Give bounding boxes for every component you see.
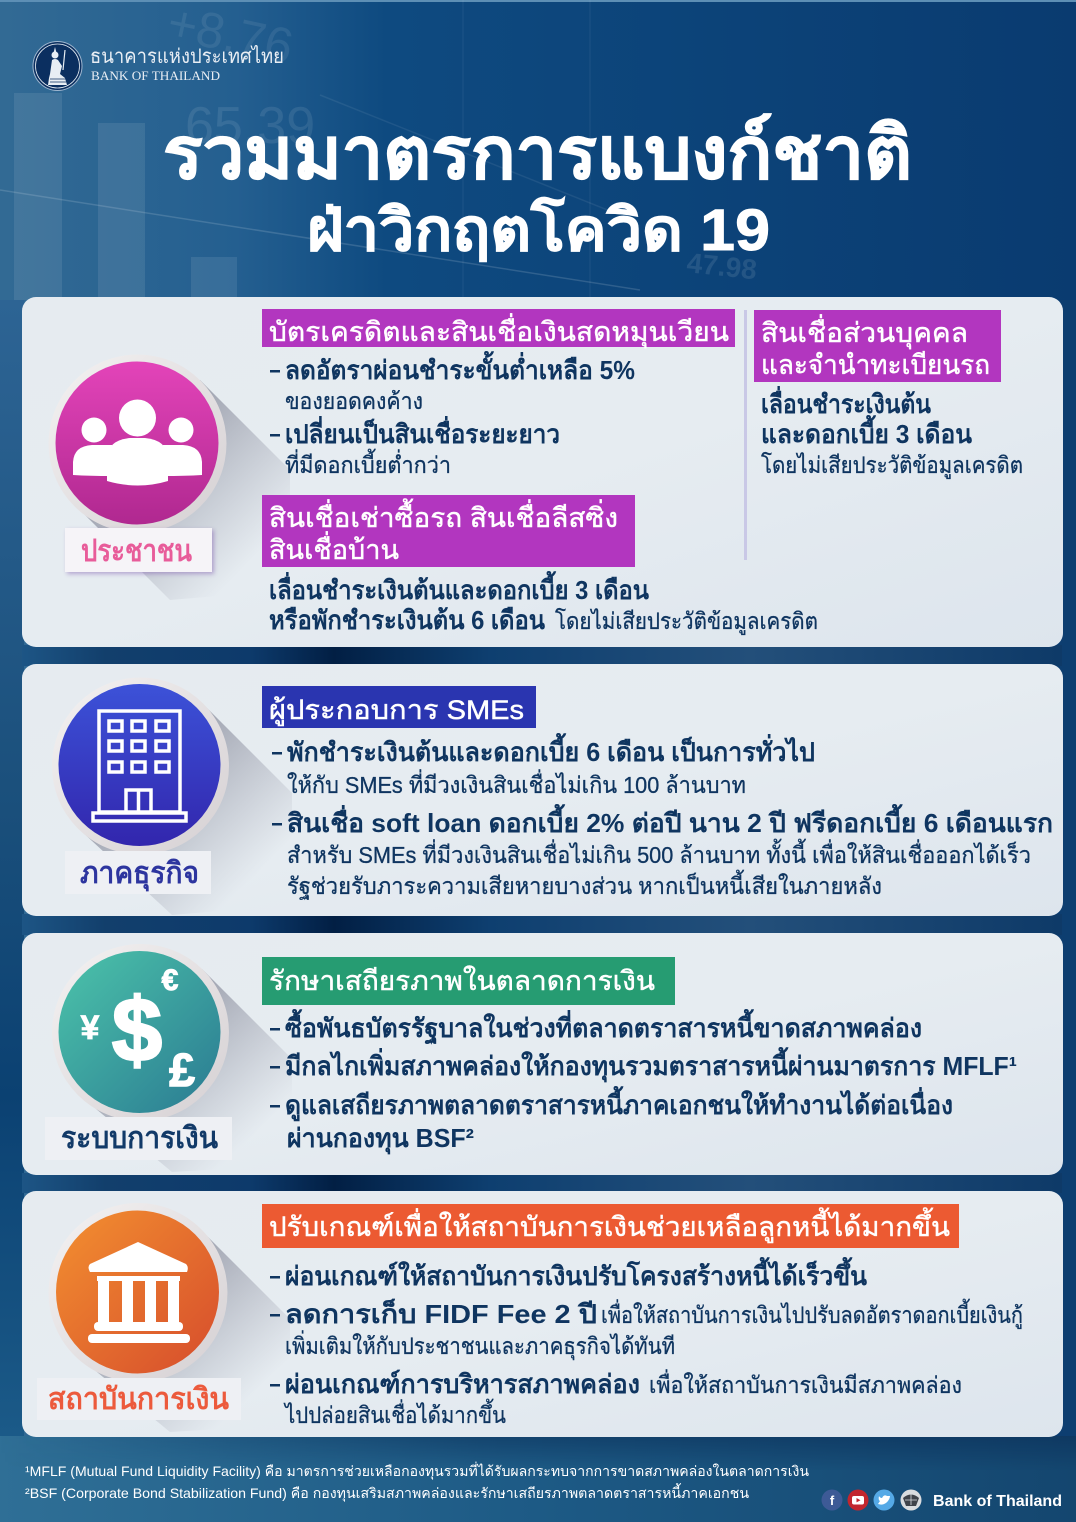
heading tag: market stability: รักษาเสถียรภาพในตลาดการเงิน [269,965,655,996]
icon: currencies: € [162,964,179,997]
panel: สถาบันการเงิน (financial institutions) [22,1191,1063,1437]
label: ระบบการเงิน [45,1117,232,1160]
heading tag: market stability [262,957,675,1005]
text block: financial market measures: ผ่านกองทุน BSF² [287,1123,474,1155]
text block: credit card measures [270,350,635,478]
organisation name [90,45,284,83]
icon: currencies: $ [112,981,162,1081]
text block: hire purchase measures: โดยไม่เสียประวัติข้อมูลเครดิต [555,608,818,635]
text block: institution measures: เพิ่มเติมให้กับประชาชนและภาคธุรกิจได้ทันที [285,1330,675,1360]
organisation name: ธนาคารแห่งประเทศไทย [90,45,284,68]
title: ฝ่าวิกฤตโควิด 19 [307,195,770,263]
heading tag: hire purchase: สินเชื่อเช่าซื้อรถ สินเชื่อลีสซิ่ง [269,498,618,533]
footnotes: ¹MFLF (Mutual Fund Liquidity Facility) คือ มาตรการช่วยเหลือกองทุนรวมที่ได้รับผลกระทบจากการขาดสภาพคล่องในตลาดการเงิน [25,1462,809,1480]
label: ภาคธุรกิจ [65,851,211,894]
label: สถาบันการเงิน: สถาบันการเงิน [48,1383,229,1416]
text block: SME measures: ให้กับ SMEs ที่มีวงเงินสินเชื่อไม่เกิน 100 ล้านบาท [287,769,746,798]
text block: institution measures: เพื่อให้สถาบันการเงินไปปรับลดอัตราดอกเบี้ยเงินกู้ [601,1299,1023,1329]
text block: financial market measures: มีกลไกเพิ่มสภาพคล่องให้กองทุนรวมตราสารหนี้ผ่านมาตรการ MFLF¹ [285,1046,1017,1083]
social media icons [822,1490,922,1510]
text block: SME measures [272,732,1053,900]
heading tag: personal loan: สินเชื่อส่วนบุคคล [761,314,968,350]
text block: hire purchase measures [269,570,818,635]
label: ภาคธุรกิจ: ภาคธุรกิจ [80,857,199,892]
text block: institution measures [270,1256,1023,1428]
text block: institution measures: ผ่อนเกณฑ์การบริหารสภาพคล่อง [285,1369,640,1399]
heading tag: hire purchase: สินเชื่อบ้าน [269,531,399,565]
title: รวมมาตรการแบงก์ชาติ [163,113,912,194]
footnotes: ²BSF (Corporate Bond Stabilization Fund) คือ กองทุนเสริมสภาพคล่องและรักษาเสถียรภาพตลาดตราสารหนี้ภาคเอกชน [25,1483,749,1502]
icon: building [52,678,292,915]
icon: currencies: ¥ [81,1009,100,1047]
panel: ประชาชน (people) [22,297,1063,647]
title [163,113,912,263]
label: ประชาชน [65,528,212,572]
text block: institution measures: ผ่อนเกณฑ์ให้สถาบันการเงินปรับโครงสร้างหนี้ได้เร็วขึ้น [285,1256,867,1291]
text block: personal loan measures: เลื่อนชำระเงินต้น [761,385,931,419]
text block: personal loan measures: และดอกเบี้ย 3 เดือน [761,414,972,449]
text block: credit card measures: ของยอดคงค้าง [285,388,423,414]
heading tag: debtor relief [262,1204,959,1248]
heading tag: personal loan [754,310,1001,382]
text block: institution measures: ลดการเก็บ FIDF Fee 2 ปี [285,1298,597,1329]
text block: personal loan measures: โดยไม่เสียประวัติข้อมูลเครดิต [761,452,1023,479]
icon: currencies [52,944,292,1172]
page background: 65.39 [185,97,315,155]
organisation name: BANK OF THAILAND [91,68,220,83]
icon: bank building [48,1203,290,1432]
heading tag: debtor relief: ปรับเกณฑ์เพื่อให้สถาบันการเงินช่วยเหลือลูกหนี้ได้มากขึ้น [269,1207,950,1243]
text block: SME measures: พักชำระเงินต้นและดอกเบี้ย 6 เดือน เป็นการทั่วไป [287,732,815,767]
icon: people [48,354,290,600]
label: ประชาชน: ประชาชน [81,535,192,568]
heading tag: credit card: บัตรเครดิตและสินเชื่อเงินสดหมุนเวียน [269,313,729,349]
text block: credit card measures: เปลี่ยนเป็นสินเชื่อระยะยาว [285,415,560,449]
text block: institution measures: เพื่อให้สถาบันการเงินมีสภาพคล่อง [649,1369,962,1398]
text block: credit card measures: ลดอัตราผ่อนชำระขั้นต่ำเหลือ 5% [285,350,635,385]
panel: ระบบการเงิน (financial system) [22,933,1063,1175]
text block: hire purchase measures: หรือพักชำระเงินต้น 6 เดือน [269,605,545,635]
text block: financial market measures: ซื้อพันธบัตรรัฐบาลในช่วงที่ตลาดตราสารหนี้ขาดสภาพคล่อง [285,1008,922,1046]
text block: financial market measures: ดูแลเสถียรภาพตลาดตราสารหนี้ภาคเอกชนให้ทำงานได้ต่อเนื่อง [285,1085,953,1122]
text block: SME measures: รัฐช่วยรับภาระความเสียหายบางส่วน หากเป็นหนี้เสียในภายหลัง [287,870,882,900]
social media icons: f [830,1493,835,1508]
heading tag: credit card [262,309,735,349]
panel: ภาคธุรกิจ (business) [22,664,1063,916]
text block: hire purchase measures: เลื่อนชำระเงินต้นและดอกเบี้ย 3 เดือน [269,570,649,605]
icon: currencies: £ [169,1044,195,1096]
text block: SME measures: สินเชื่อ soft loan ดอกเบี้ย 2% ต่อปี นาน 2 ปี ฟรีดอกเบี้ย 6 เดือนแรก [287,803,1053,838]
heading tag: personal loan: และจำนำทะเบียนรถ [761,350,990,380]
logo: Bank of Thailand seal [33,42,82,90]
brand name: Bank of Thailand [933,1493,1062,1510]
text block: SME measures: สำหรับ SMEs ที่มีวงเงินสินเชื่อไม่เกิน 500 ล้านบาท ทั้งนี้ เพื่อให้สินเชื่อออกได้เร็ว [287,839,1031,868]
text block: institution measures: ไปปล่อยสินเชื่อได้มากขึ้น [283,1399,506,1428]
heading tag: SMEs [262,686,536,728]
text block: credit card measures: ที่มีดอกเบี้ยต่ำกว่า [285,449,451,478]
heading tag: SMEs: ผู้ประกอบการ SMEs [269,695,524,726]
page background: 47.98 [685,247,758,285]
label: ระบบการเงิน: ระบบการเงิน [61,1122,218,1155]
heading tag: hire purchase [262,495,635,567]
footnotes [25,1462,809,1502]
text block: financial market measures [270,1008,1017,1155]
text block: personal loan measures [761,385,1023,479]
